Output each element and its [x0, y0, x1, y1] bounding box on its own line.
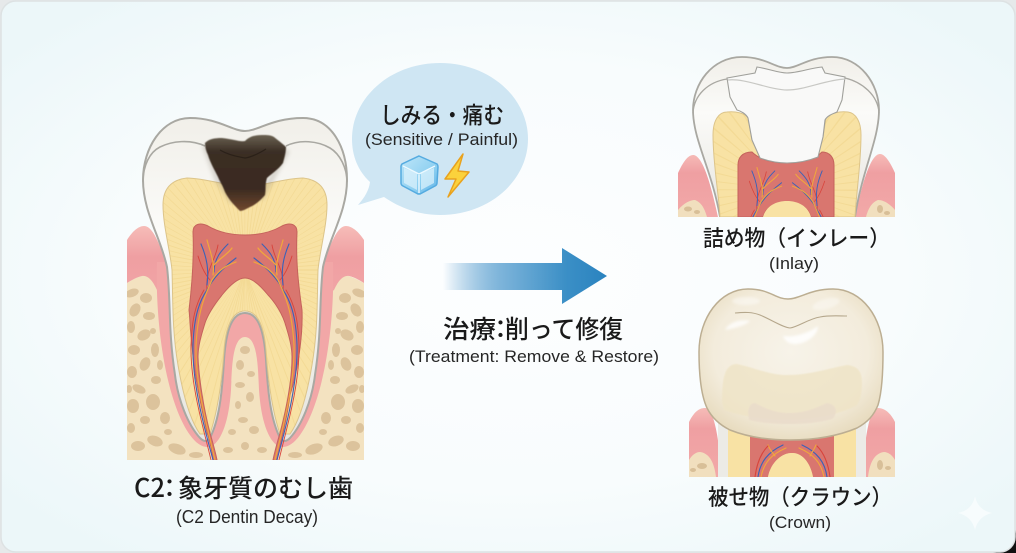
treatment heading: ：: [488, 310, 513, 346]
gums: [689, 408, 895, 477]
bone spots left: [124, 287, 203, 458]
main tooth illustration: [124, 118, 367, 460]
treatment heading: [443, 310, 623, 346]
inlay heading: 詰め物（インレー）: [703, 221, 890, 253]
dentine: [728, 429, 856, 477]
decay cavity: [205, 135, 286, 211]
vessels left: [749, 167, 782, 217]
main tooth heading: ：: [157, 469, 182, 505]
main tooth subtext: (C2 Dentin Decay): [176, 507, 318, 527]
dentine rays: [737, 140, 837, 240]
crown highlights: [725, 296, 841, 344]
decay shadow: [205, 145, 287, 200]
gum left: [127, 226, 165, 290]
periodontal pink band and inter-root bone arch: [157, 290, 333, 447]
inner ghost two: [748, 403, 836, 424]
inlay restoration: [727, 67, 845, 163]
inner ghost: [722, 364, 862, 420]
bone and gum: [678, 154, 895, 217]
gum right: [325, 226, 364, 290]
crown heading: 被せ物（クラウン）: [708, 480, 892, 512]
icon: lightning bolt: [445, 154, 469, 197]
nerves and vessels left: [191, 240, 236, 460]
inlay tooth illustration: [678, 56, 895, 217]
dentine tubule rays: [164, 178, 326, 434]
bubble subtext: (Sensitive / Painful): [365, 130, 518, 149]
pulp: [738, 152, 834, 217]
bone patch spots: [690, 460, 891, 472]
arch dentine: [763, 201, 811, 217]
vessels: [755, 445, 830, 477]
decay surface groove: [220, 149, 266, 158]
root band: [718, 420, 866, 477]
treatment heading: 削って修復: [505, 310, 623, 346]
bone patches: [678, 200, 895, 217]
main tooth heading: 象牙質のむし歯: [178, 469, 353, 505]
bone background: [127, 275, 364, 460]
arch bone spots: [223, 346, 267, 453]
dentine: [163, 178, 327, 434]
speech bubble: [352, 63, 528, 215]
crown subtext: (Crown): [769, 514, 831, 532]
sparkle: [958, 496, 992, 530]
tooth body: [693, 57, 879, 217]
bone patches: [689, 452, 895, 477]
tooth enamel and cementum: [143, 118, 347, 441]
icon: ice cube: [401, 156, 438, 194]
crown groove: [735, 312, 847, 328]
vessels right: [792, 167, 825, 217]
arch dentine: [768, 453, 813, 477]
bone patch spots: [684, 205, 890, 215]
pulp: [750, 436, 834, 477]
dentine: [713, 112, 861, 217]
crown: [699, 289, 883, 440]
enamel line: [143, 142, 347, 182]
crown tooth illustration: [689, 289, 895, 477]
enamel lines: [693, 78, 879, 113]
bubble heading: しみる・痛む: [380, 96, 504, 130]
bone spots right: [288, 287, 367, 458]
nerves and vessels right: [254, 240, 299, 460]
main tooth heading: C2: [134, 468, 165, 505]
inlay subtext: (Inlay): [769, 255, 819, 273]
inlay groove: [728, 79, 845, 90]
treatment subtext: (Treatment: Remove & Restore): [409, 347, 659, 366]
pulp: [189, 224, 302, 460]
treatment heading: 治療: [443, 310, 496, 346]
arrow: [443, 248, 607, 304]
